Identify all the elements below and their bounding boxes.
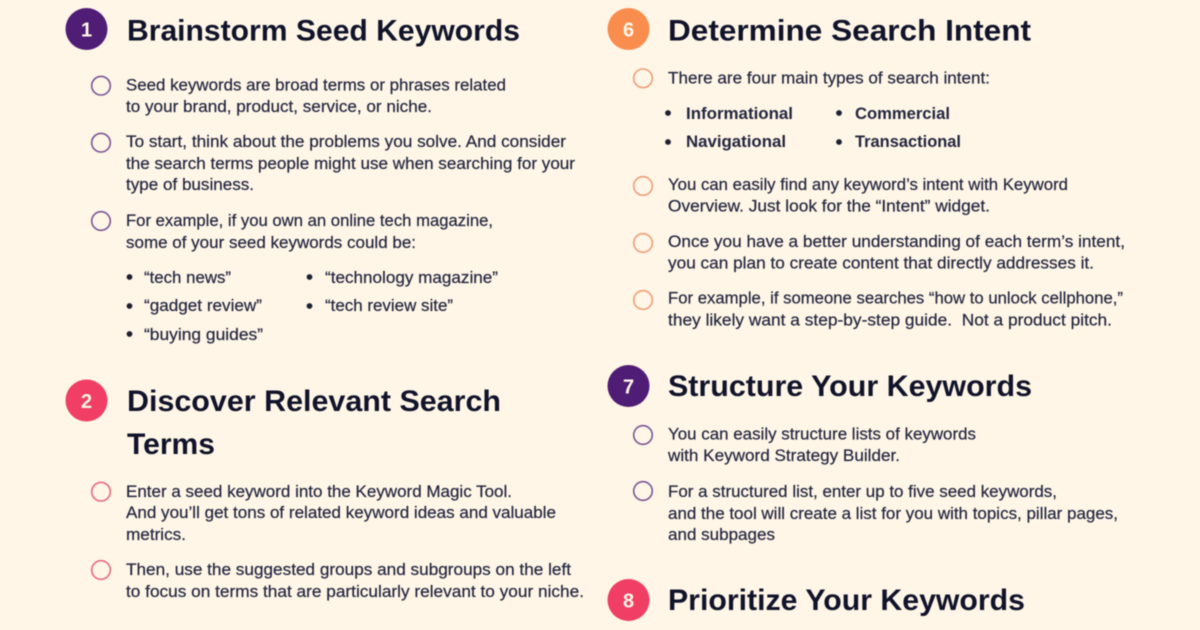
bullet item: to start: To start, think about the problems you solve. And consider	[126, 133, 567, 151]
bullet item: example: some of your seed keywords could be:	[126, 234, 416, 252]
bullet item: example: For example, if someone searches “how to unlock cellphone,”	[668, 290, 1123, 308]
bullet item: example: they likely want a step-by-step guide. Not a product pitch.	[668, 312, 1112, 330]
bullet item: groups: to focus on terms that are particularly relevant to your niche.	[126, 583, 584, 601]
bullet item: to start: the search terms people might use when searching for your	[126, 155, 576, 173]
bullet item: structured list: For a structured list, enter up to five seed keywords,	[668, 483, 1057, 501]
bullet item: strategy builder: You can easily structure lists of keywords	[668, 426, 976, 444]
badge: 7	[608, 365, 650, 407]
panel: step 6	[608, 8, 1125, 330]
panel: step 7	[608, 365, 1118, 544]
badge: 6: 6	[623, 20, 634, 42]
bullet item: to start	[92, 133, 576, 194]
bullet item: keyword magic tool	[92, 482, 556, 544]
badge: 8	[608, 579, 650, 621]
bullet item: better understanding	[634, 233, 1125, 272]
panel: step 1	[66, 8, 576, 344]
bullet item: four types: There are four main types of search intent:	[668, 70, 990, 88]
badge: 1: 1	[81, 20, 92, 42]
bullet item: keyword magic tool: Enter a seed keyword into the Keyword Magic Tool.	[126, 483, 512, 501]
heading: step 2	[127, 385, 501, 461]
heading: step 2: Terms	[127, 428, 215, 461]
heading: step 6: Determine Search Intent	[668, 14, 1031, 48]
bullet item: better understanding: you can plan to create content that directly addresses it.	[668, 254, 1094, 272]
panel: step 8	[608, 579, 1025, 621]
heading: step 2: Discover Relevant Search	[127, 385, 501, 418]
bullet item: seed keywords	[92, 76, 506, 116]
badge: 1	[66, 8, 108, 50]
badge: 2	[66, 380, 108, 422]
panel: step 2	[66, 380, 584, 601]
bullet item: example	[634, 290, 1123, 330]
intent types list: Informational	[686, 105, 793, 123]
seed keyword examples list	[127, 269, 498, 344]
bullet item: strategy builder: with Keyword Strategy Builder.	[667, 447, 900, 465]
bullet item: keyword overview: Overview. Just look for the “Intent” widget.	[668, 198, 990, 216]
bullet item: structured list: and subpages	[668, 526, 775, 544]
bullet item: seed keywords: to your brand, product, service, or niche.	[126, 98, 432, 116]
seed keyword examples list: “technology magazine”	[325, 269, 498, 287]
intent types list: Transactional	[855, 133, 961, 151]
badge: 7: 7	[623, 376, 634, 398]
bullet item: better understanding: Once you have a better understanding of each term’s intent,	[668, 233, 1125, 251]
intent types list: Navigational	[686, 133, 786, 151]
bullet item: keyword overview	[634, 176, 1068, 216]
bullet item: seed keywords: Seed keywords are broad terms or phrases related	[126, 76, 506, 94]
bullet item: keyword overview: You can easily find any keyword’s intent with Keyword	[668, 176, 1068, 194]
bullet item: to start: type of business.	[126, 176, 254, 194]
heading: step 7: Structure Your Keywords	[668, 370, 1032, 403]
seed keyword examples list: “gadget review”	[144, 297, 262, 315]
seed keyword examples list: “tech review site”	[325, 297, 453, 315]
badge: 6	[608, 8, 650, 50]
bullet item: example: For example, if you own an online tech magazine,	[126, 212, 493, 230]
bullet item: keyword magic tool: metrics.	[126, 526, 186, 544]
seed keyword examples list: “tech news”	[144, 269, 231, 287]
bullet item: groups	[92, 561, 584, 601]
badge: 2: 2	[81, 391, 92, 413]
heading: step 1: Brainstorm Seed Keywords	[127, 14, 520, 48]
bullet item: strategy builder	[634, 426, 976, 465]
bullet item: structured list: and the tool will create a list for you with topics, pillar pages,	[668, 505, 1118, 523]
badge: 8: 8	[623, 590, 634, 612]
intent types list: Commercial	[855, 105, 950, 123]
intent types list	[665, 105, 961, 151]
bullet item: groups: Then, use the suggested groups and subgroups on the left	[126, 561, 571, 579]
heading: step 8: Prioritize Your Keywords	[668, 584, 1025, 617]
bullet item: structured list	[634, 482, 1118, 544]
bullet item: example	[92, 212, 493, 252]
bullet item: keyword magic tool: And you’ll get tons of related keyword ideas and valuable	[126, 504, 556, 522]
seed keyword examples list: “buying guides”	[144, 326, 263, 344]
